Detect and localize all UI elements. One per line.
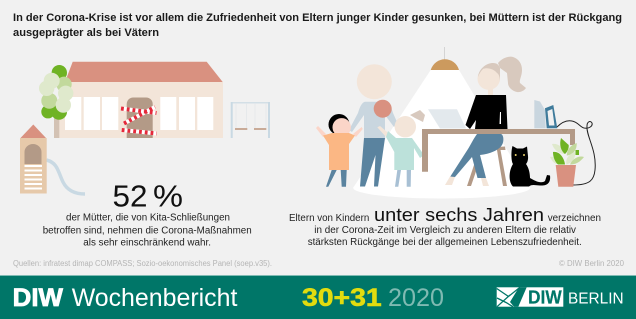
text block: mothers: betroffen sind, nehmen die Corona-Maßnahmen	[43, 225, 252, 236]
lamp	[431, 47, 459, 70]
text block: parents: verzeichnen	[548, 213, 601, 224]
laptop	[428, 109, 466, 128]
cat	[510, 146, 550, 186]
issue number	[302, 284, 444, 312]
text block: parents	[289, 204, 601, 248]
title: ausgeprägter als bei Vätern	[13, 27, 159, 39]
lamp light cone	[353, 70, 530, 198]
illustration: family at home	[316, 47, 595, 198]
school building	[59, 62, 223, 138]
statistic: 52 percent	[112, 178, 183, 214]
slide tower	[20, 124, 85, 194]
statistic: 52 percent: 52	[112, 178, 148, 214]
tree	[39, 65, 73, 138]
DIW Berlin logo: DIW	[528, 288, 562, 308]
swing set	[231, 102, 270, 138]
text block: parents: Eltern von Kindern	[289, 213, 369, 224]
text block: mothers: der Mütter, die von Kita-Schließungen	[66, 213, 230, 224]
copyright note: © DIW Berlin 2020	[559, 259, 625, 268]
issue number: 2020	[388, 284, 444, 312]
child right	[377, 110, 427, 187]
text block: mothers: als sehr einschränkend wahr.	[83, 238, 211, 249]
text block: parents: in der Corona-Zeit im Vergleich zu anderen Eltern die relativ	[314, 225, 576, 236]
child left	[316, 114, 363, 187]
footer band	[0, 275, 636, 319]
mother	[445, 57, 526, 186]
stool	[467, 146, 507, 186]
iron cable	[557, 121, 595, 185]
father	[349, 64, 397, 186]
illustration: closed daycare	[20, 62, 270, 194]
text block: parents: stärksten Rückgänge bei der allgemeinen Lebenszufriedenheit.	[308, 237, 582, 248]
statistic: 52 percent: %	[153, 178, 183, 214]
source note: Quellen: infratest dimap COMPASS; Sozio-oekonomisches Panel (soep.v35).	[13, 259, 272, 268]
title: In der Corona-Krise ist vor allem die Zufriedenheit von Eltern junger Kinder gesunken, bei Müttern ist der Rückgang	[13, 12, 622, 24]
plant	[550, 138, 584, 187]
text block: mothers	[43, 213, 252, 249]
DIW Berlin logo	[497, 287, 624, 308]
text block: parents: unter sechs Jahren	[374, 204, 544, 225]
footer title: DIW	[13, 284, 63, 312]
table	[422, 129, 575, 172]
barrier tape	[121, 107, 157, 134]
issue number: 30+31	[302, 284, 382, 312]
iron	[534, 100, 557, 128]
footer title: Wochenbericht	[72, 284, 237, 312]
DIW Berlin logo: BERLIN	[568, 290, 624, 307]
title	[13, 12, 622, 39]
